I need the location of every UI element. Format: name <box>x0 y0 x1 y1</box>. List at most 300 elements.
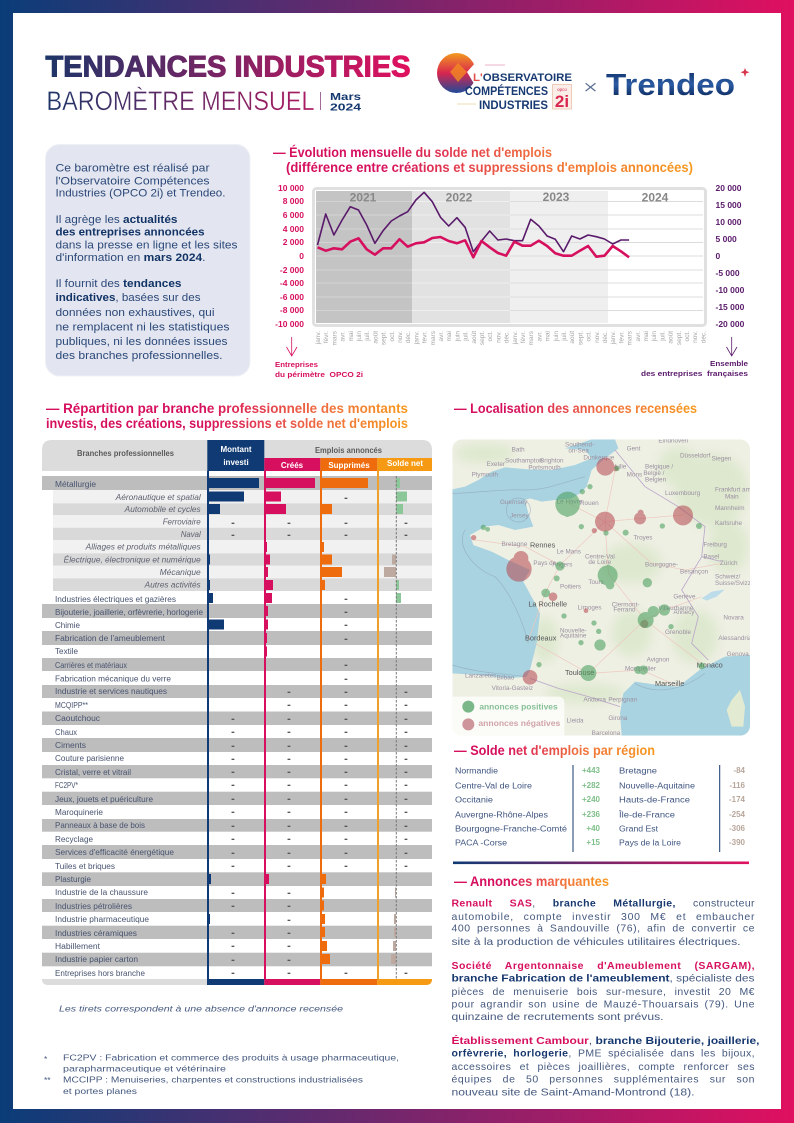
place names: Luxembourg <box>665 490 701 497</box>
announcement: Renault SAS: automobile, compte investir 300 M€ et embaucher <box>452 911 755 923</box>
place names: Guernsey <box>500 499 528 506</box>
dashes: absence of announcement: - <box>404 793 408 805</box>
table header: Emplois annoncés <box>315 446 383 455</box>
regions en solde positif <box>455 766 601 848</box>
table header: Montant <box>220 445 252 454</box>
map legend <box>452 697 564 736</box>
month axis labels: mai <box>446 331 453 341</box>
place names: Girona <box>608 715 628 722</box>
dashes: absence of announcement: - <box>404 820 408 832</box>
place names: Aquitaine <box>560 632 587 639</box>
table header: investi <box>223 458 249 467</box>
month axis labels: juin <box>553 331 560 342</box>
branch labels: Couture parisienne <box>55 754 125 763</box>
place names: Poitiers <box>560 583 581 590</box>
branch labels <box>55 480 204 978</box>
announcement: Établissement Cambour: orfèvrerie, horlogerie, PME spécialisée dans les bijoux, <box>452 1048 754 1060</box>
regions en solde négatif: -254 <box>729 810 746 819</box>
place names: Troyes <box>633 534 652 541</box>
branch labels: Électrique, électronique et numérique <box>64 556 201 564</box>
dashes: absence of announcement: - <box>404 726 408 738</box>
month axis labels: juin <box>454 331 461 342</box>
dashes: absence of announcement: - <box>287 887 291 899</box>
heading: solde net par région: — Solde net d'emplois par région <box>454 743 655 758</box>
announcement: Établissement Cambour: accessoires et pièces joaillières, compte renforcer ses <box>452 1061 754 1073</box>
multiplication sign: × <box>583 77 598 99</box>
month axis labels: mai <box>643 331 650 341</box>
dashes: absence of announcement: - <box>404 833 408 845</box>
announcement: Renault SAS: site à la production de véhicules utilitaires électriques. <box>452 936 740 948</box>
line chart: solde net mensuel: 2023 <box>543 190 570 204</box>
dashes: absence of announcement: - <box>344 753 348 765</box>
dashes: absence of announcement: - <box>231 954 235 966</box>
panel: introduction: des entreprises annoncées <box>56 227 204 239</box>
dashes: absence of announcement: - <box>344 806 348 818</box>
table header: Branches professionnelles <box>77 449 175 458</box>
place names: Basel <box>703 553 719 560</box>
place names: Lille <box>615 463 627 470</box>
place names: Avignon <box>647 657 670 664</box>
table header: Solde net <box>387 459 423 468</box>
dashes: absence of announcement: - <box>404 967 408 979</box>
dashes: absence of announcement: - <box>344 713 348 725</box>
dashes: absence of announcement: - <box>344 820 348 832</box>
caption: ensemble des entreprises: Ensemble <box>710 359 748 368</box>
left axis labels: -6 000 <box>280 292 304 302</box>
arrow: right axis <box>726 337 737 356</box>
place names: Ferrand <box>613 607 636 614</box>
place names: Toulouse <box>565 668 594 677</box>
arrow: left axis <box>286 337 297 356</box>
dashes: absence of announcement: - <box>404 860 408 872</box>
dashes: absence of announcement: - <box>231 753 235 765</box>
place names: Novara <box>723 614 744 621</box>
dashes: absence of announcement: - <box>344 833 348 845</box>
table header: Créés <box>281 461 304 470</box>
branch labels: Bijouterie, joaillerie, orfèvrerie, horlogerie <box>55 608 204 617</box>
branch labels: FC2PV* <box>55 781 78 790</box>
branch labels: Automobile et cycles <box>124 505 201 514</box>
place names: Plymouth <box>472 472 499 479</box>
date: Mars <box>330 91 361 103</box>
branch labels: Naval <box>181 530 201 539</box>
roads <box>475 470 722 683</box>
place names: Montpellier <box>625 666 656 673</box>
place names: Alessandria <box>718 635 752 642</box>
dashes: absence of announcement: - <box>287 833 291 845</box>
month axis labels: janv. <box>512 331 519 345</box>
dashes: absence of announcement: - <box>344 699 348 711</box>
branch labels: Jeux, jouets et puériculture <box>55 795 154 804</box>
dashes: absence of announcement: - <box>287 726 291 738</box>
line: entreprises du périmètre OPCO 2i <box>318 237 629 257</box>
dashes: absence of announcement: - <box>404 686 408 698</box>
month axis labels: juil. <box>561 331 568 342</box>
month axis labels: avr. <box>635 331 642 341</box>
footnotes: ** <box>44 1075 51 1085</box>
footnotes: MCCIPP : Menuiseries, charpentes et constructions industrialisées <box>63 1074 363 1084</box>
place names: Genova <box>727 651 749 658</box>
dashes: absence of announcement: - <box>404 740 408 752</box>
month axis labels: mars <box>331 330 338 345</box>
dashes: absence of announcement: - <box>231 793 235 805</box>
dashes: absence of announcement: - <box>231 967 235 979</box>
month axis labels: févr. <box>323 331 330 343</box>
regions en solde positif: +40 <box>586 824 601 833</box>
place names: Grenoble <box>665 629 692 636</box>
dashes: absence of announcement: - <box>344 779 348 791</box>
dashes: absence of announcement: - <box>287 860 291 872</box>
regions en solde positif: Bourgogne-Franche-Comté <box>455 824 568 834</box>
heading: évolution mensuelle <box>273 145 693 175</box>
right axis labels: 10 000 <box>716 217 742 227</box>
dashes: absence of announcement: - <box>344 793 348 805</box>
dashes: absence of announcement: - <box>287 967 291 979</box>
branch labels: Industrie papier carton <box>55 955 138 964</box>
place names: Zürich <box>720 560 738 567</box>
place names: Portsmouth <box>528 464 561 471</box>
dashes: absence of announcement: - <box>344 673 348 685</box>
month axis labels: févr. <box>618 331 625 343</box>
dashes: absence of announcement: - <box>404 529 408 541</box>
place names: Eindhoven <box>658 438 689 445</box>
branch labels: Cristal, verre et vitrail <box>55 768 131 777</box>
branch labels: Plasturgie <box>55 875 92 884</box>
place names: Düsseldorf <box>680 452 710 459</box>
panel: introduction: ne remplacent ni les statistiques <box>56 322 230 334</box>
branch labels: Panneaux à base de bois <box>55 821 145 830</box>
regions en solde positif: Centre-Val de Loire <box>455 782 533 790</box>
table header <box>42 440 432 471</box>
branch labels: Industries électriques et gazières <box>55 595 176 604</box>
place names: Freiburg <box>703 542 727 549</box>
place names: Schweiz/ <box>715 573 741 580</box>
dashes: absence of announcement: - <box>231 529 235 541</box>
month axis labels: août <box>471 331 478 344</box>
branch labels: Chimie <box>55 621 81 630</box>
branch labels: Industrie pharmaceutique <box>55 915 150 924</box>
month axis labels: août <box>569 331 576 344</box>
place names: Dunkerque <box>583 454 615 461</box>
logo: Observatoire Compétences Industries: opco <box>557 87 567 92</box>
map of announcements <box>452 438 762 737</box>
place names: Siegen <box>712 456 732 463</box>
right axis labels: -5 000 <box>716 268 740 278</box>
branch labels: Entreprises hors branche <box>55 969 146 978</box>
dashes: absence of announcement: - <box>344 860 348 872</box>
title: 2024 <box>330 102 361 114</box>
dashes: absence of announcement: - <box>404 517 408 529</box>
branch labels: Chaux <box>55 728 77 737</box>
dashes: absence of announcement: - <box>287 847 291 859</box>
branch labels: Habillement <box>55 942 101 951</box>
dashes: absence of announcement: - <box>404 847 408 859</box>
column separators <box>208 471 396 980</box>
dashes: absence of announcement: - <box>231 713 235 725</box>
footnotes: et portes planes <box>63 1086 137 1096</box>
month axis labels: oct. <box>487 331 494 341</box>
place names: Brighton <box>540 458 564 465</box>
month axis labels: juin <box>356 331 363 342</box>
line chart: solde net mensuel: 2021 <box>350 190 377 204</box>
regions en solde négatif <box>618 766 746 848</box>
dashes: absence of announcement: - <box>344 606 348 618</box>
branch labels: Aéronautique et spatial <box>115 493 201 502</box>
logo: Observatoire Compétences Industries: L'OBSERVATOIRE <box>473 72 572 84</box>
dashes: absence of announcement: - <box>344 686 348 698</box>
footnotes: * <box>44 1054 48 1064</box>
panel: introduction: données non exhaustives, qui <box>56 307 214 319</box>
place names: Mannheim <box>715 505 745 512</box>
regions en solde positif: +15 <box>586 838 601 847</box>
left axis labels: 4 000 <box>283 224 304 234</box>
month axis labels: juil. <box>463 331 470 342</box>
place names: Belgien <box>645 477 667 484</box>
regions en solde négatif: Île-de-France <box>618 810 676 820</box>
dashes: absence of announcement: - <box>287 940 291 952</box>
heading: répartition par branche: investis, des créations, suppressions et solde net d'emplois <box>46 416 408 431</box>
branch labels: Industrie de la chaussure <box>55 888 149 897</box>
footnotes <box>44 1052 399 1096</box>
panel: introduction: Il agrège les actualités <box>56 214 178 226</box>
place names: Angers <box>552 562 572 569</box>
branch labels: Fabrication mécanique du verre <box>55 674 172 684</box>
place names: Lleida <box>567 718 584 725</box>
place names: Mons <box>627 472 642 479</box>
place names: Genève <box>673 593 696 600</box>
month axis labels: janv. <box>315 331 322 345</box>
place names: Besançon <box>680 568 709 575</box>
dashes: absence of announcement: - <box>344 726 348 738</box>
month axis labels: avr. <box>438 331 445 341</box>
line chart: solde net mensuel: 2024 <box>642 190 669 204</box>
announcement: Renault SAS <box>452 898 755 948</box>
regions en solde négatif: Hauts-de-France <box>619 796 691 804</box>
caption: entreprises du périmètre <box>275 360 363 379</box>
month axis labels: janv. <box>413 331 420 345</box>
dashes: absence of announcement: - <box>404 779 408 791</box>
table header: Supprimés <box>328 461 370 470</box>
place names: Pays de <box>533 560 557 567</box>
place names: Vitoria-Gasteiz <box>492 685 533 692</box>
dashes: absence of announcement: - <box>231 860 235 872</box>
dashes: absence of announcement: - <box>344 847 348 859</box>
dashes: absence of announcement: - <box>231 740 235 752</box>
panel: introduction: publiques, ni les données issues <box>56 336 228 348</box>
place names: Clermont- <box>612 602 639 609</box>
panel: introduction: dans la presse en ligne et les sites <box>56 239 238 251</box>
regions en solde négatif: Nouvelle-Aquitaine <box>619 782 696 790</box>
branch labels: Services d'efficacité énergétique <box>55 848 175 857</box>
month axis labels: mai <box>348 331 355 341</box>
dashes: absence of announcement: - <box>231 900 235 912</box>
annonces positives <box>481 466 705 681</box>
announcement: SARGAM: pour agrandir son usine de Mauzé-Thouarsais (79). Une <box>452 999 755 1011</box>
month axis labels: janv. <box>610 331 617 345</box>
left axis labels: -4 000 <box>280 278 304 288</box>
announcement: Renault SAS: 400 personnes à Sandouville (76), afin de convertir ce <box>452 923 755 935</box>
place names: Bretagne <box>502 541 528 548</box>
map legend: annonces négatives <box>478 718 561 728</box>
heading: évolution mensuelle: — Évolution mensuelle du solde net d'emplois <box>273 145 552 160</box>
dashes: absence of announcement: - <box>231 766 235 778</box>
bars: solde net <box>384 478 407 964</box>
left axis labels: -10 000 <box>275 319 304 329</box>
month axis labels: juin <box>651 331 658 342</box>
dashes: absence of announcement: - <box>344 619 348 631</box>
branch labels: Alliages et produits métalliques <box>85 542 201 552</box>
branch labels: Caoutchouc <box>55 714 100 723</box>
announcement: Établissement Cambour: équipes de 50 personnes supplémentaires sur son <box>452 1074 755 1086</box>
dashes: absence of announcement: - <box>287 954 291 966</box>
month axis labels: juil. <box>364 331 371 342</box>
dashes: absence of announcement: - <box>231 517 235 529</box>
dashes: absence of announcement: - <box>231 833 235 845</box>
panel: introduction: Ce baromètre est réalisé par <box>56 162 210 174</box>
place names: Villeurbanne <box>658 605 694 612</box>
subtitle: BAROMÈTRE MENSUEL <box>46 86 314 116</box>
regions en solde positif: +236 <box>582 810 601 819</box>
left axis labels <box>275 183 304 329</box>
logo: Observatoire Compétences Industries: INDUSTRIES <box>479 100 548 112</box>
dashes: absence of announcement: - <box>287 793 291 805</box>
month axis labels: août <box>372 331 379 344</box>
footnotes: parapharmaceutique et vétérinaire <box>63 1064 226 1074</box>
announcement: Renault SAS: Renault SAS, branche Métallurgie, constructeur <box>452 898 755 910</box>
left axis labels: -8 000 <box>280 305 304 315</box>
left axis labels: -2 000 <box>280 265 304 275</box>
place names: Frankfurt am <box>715 487 751 494</box>
branch labels: Industrie et services nautiques <box>55 687 167 696</box>
month axis labels: mars <box>430 330 437 345</box>
place names: Jersey <box>510 512 529 519</box>
branch labels: Ciments <box>55 741 86 750</box>
place names: Monaco <box>697 660 723 669</box>
dashes: absence of announcement: - <box>404 713 408 725</box>
place names: Rouen <box>580 500 599 507</box>
place names: Annecy <box>673 609 695 616</box>
note: tirets: Les tirets correspondent à une absence d'annonce recensée <box>59 1004 343 1014</box>
announcement: Établissement Cambour: nouveau site de Saint-Amand-Montrond (18). <box>452 1087 694 1099</box>
maritime limits <box>452 477 705 690</box>
regions en solde négatif: Pays de la Loire <box>619 838 682 848</box>
dashes: absence of announcement: - <box>287 740 291 752</box>
title <box>46 50 410 116</box>
place names: Suisse/Svizzera/ <box>715 580 762 587</box>
month axis labels: juil. <box>659 331 666 342</box>
month axis labels <box>315 330 707 345</box>
dashes: absence of announcement: - <box>231 847 235 859</box>
branch labels: Tuiles et briques <box>55 862 115 871</box>
place names: Andorra <box>583 697 606 704</box>
month axis labels: févr. <box>422 331 429 343</box>
dashes: absence of announcement: - <box>404 806 408 818</box>
dashes: absence of announcement: - <box>231 887 235 899</box>
dashes: absence of announcement: - <box>344 529 348 541</box>
place names: Barcelona <box>592 730 621 737</box>
dashes: absence of announcement: - <box>344 593 348 605</box>
regions en solde positif: +443 <box>582 766 601 775</box>
caption: entreprises du périmètre: Entreprises <box>275 360 318 369</box>
announcement: SARGAM: quinzaine de recrutements sont prévus. <box>452 1011 664 1023</box>
place names: Bordeaux <box>525 634 557 643</box>
month axis labels: sept. <box>676 331 683 345</box>
month axis labels: déc. <box>405 331 412 343</box>
month axis labels: nov. <box>495 331 502 343</box>
dashes: absence of announcement: - <box>287 900 291 912</box>
month axis labels: déc. <box>602 331 609 343</box>
regions en solde positif: Occitanie <box>455 796 494 804</box>
panel: introduction: d'information en mars 2024 . <box>56 252 206 264</box>
dashes: absence of announcement: - <box>231 779 235 791</box>
heading: évolution mensuelle: (différence entre créations et suppressions d'emplois annoncées) <box>286 160 693 175</box>
month axis labels: nov. <box>397 331 404 343</box>
branch labels: Métallurgie <box>55 480 97 489</box>
place names: Perpignan <box>608 697 638 704</box>
dashes: absence of announcement <box>231 492 408 979</box>
month axis labels: avr. <box>536 331 543 341</box>
footnotes: FC2PV : Fabrication et commerce des produits à usage pharmaceutique, <box>63 1052 399 1062</box>
month axis labels: mars <box>627 330 634 345</box>
left axis labels: 10 000 <box>278 183 304 193</box>
place names: Centre-Val <box>585 553 615 560</box>
dashes: absence of announcement: - <box>287 517 291 529</box>
logo: Observatoire Compétences Industries <box>437 53 572 112</box>
regions en solde positif: +282 <box>582 781 601 790</box>
dashes: absence of announcement: - <box>287 820 291 832</box>
left axis labels: 2 000 <box>283 237 304 247</box>
right axis labels: 20 000 <box>716 183 742 193</box>
panel: introduction: indicatives , basées sur des <box>56 292 201 304</box>
borders <box>530 450 722 707</box>
month axis labels: nov. <box>692 331 699 343</box>
month axis labels: oct. <box>389 331 396 341</box>
dashes: absence of announcement: - <box>287 914 291 926</box>
month axis labels: mars <box>528 330 535 345</box>
sea <box>452 439 618 678</box>
table: solde net par région <box>455 765 746 852</box>
logo: Trendeo: Trendeo <box>606 67 735 102</box>
announcement: SARGAM: pièces de menuiserie bois sur-mesure, investit 20 M€ <box>452 986 755 998</box>
place names: Limoges <box>578 604 602 611</box>
dashes: absence of announcement: - <box>287 806 291 818</box>
place names: Exeter <box>487 461 505 468</box>
month axis labels: nov. <box>594 331 601 343</box>
place names: Le Mans <box>557 548 581 555</box>
right axis labels: -10 000 <box>716 285 745 295</box>
regions en solde négatif: Bretagne <box>619 766 658 776</box>
annonces négatives <box>471 458 693 685</box>
caption: ensemble des entreprises <box>641 359 748 378</box>
month axis labels: sept. <box>479 331 486 345</box>
announcement: SARGAM: branche Fabrication de l'ameublement , spécialiste des <box>452 973 754 985</box>
place names: Bath <box>512 447 525 454</box>
place names: Rennes <box>530 540 556 549</box>
announcement: SARGAM: Société Argentonnaise d'Ameublement (SARGAM), <box>452 960 755 972</box>
branch labels: Autres activités <box>144 580 201 590</box>
logo: Observatoire Compétences Industries: 2i <box>555 92 569 111</box>
right axis labels: 15 000 <box>716 200 742 210</box>
month axis labels: déc. <box>700 331 707 343</box>
caption: ensemble des entreprises: des entreprises françaises <box>641 369 748 378</box>
place names: Main <box>725 493 739 500</box>
place names: Southend- <box>565 442 594 449</box>
place names: Gent <box>627 446 641 453</box>
heading: répartition par branche <box>46 401 408 431</box>
regions en solde négatif: -174 <box>729 795 746 804</box>
dashes: absence of announcement: - <box>287 686 291 698</box>
left axis labels: 0 <box>299 251 304 261</box>
